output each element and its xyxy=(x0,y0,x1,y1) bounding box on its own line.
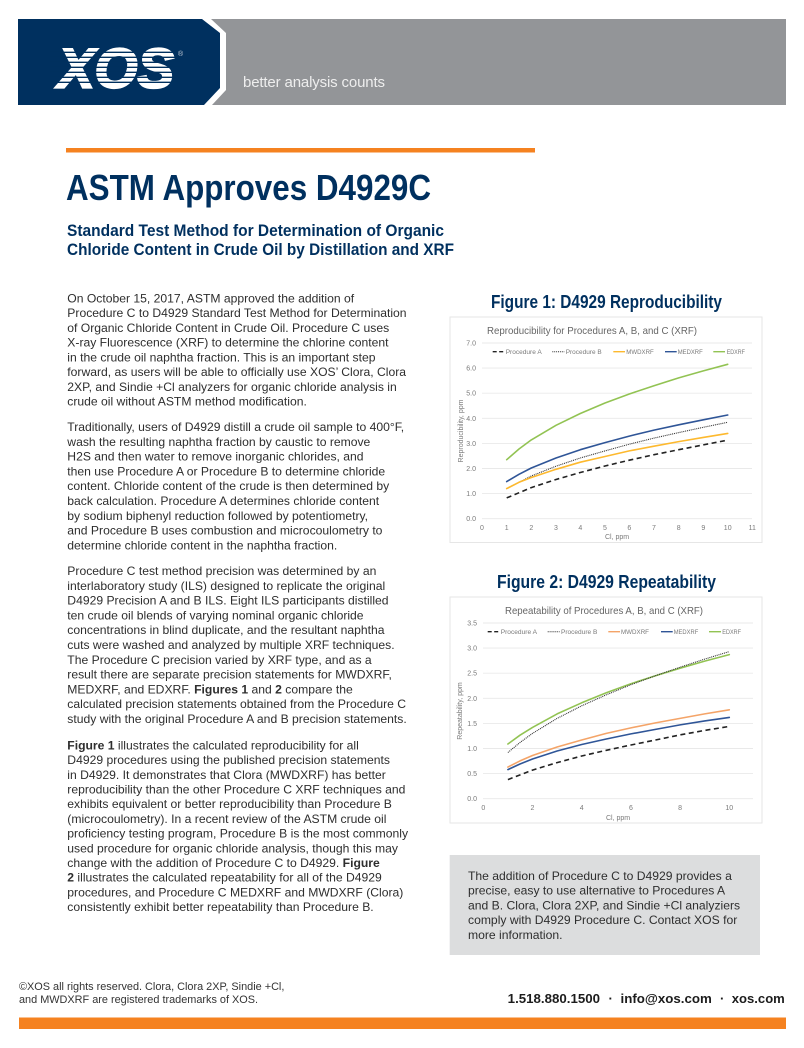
body paragraph 1: Procedure C to D4929 Standard Test Method for Determination xyxy=(67,306,407,320)
legend: Procedure A xyxy=(501,629,537,636)
body paragraph 2: back calculation. Procedure A determines chloride content xyxy=(67,494,380,508)
chart: reproducibility: 4 xyxy=(578,525,582,532)
body paragraph 4: change with the addition of Procedure C to D4929. Figure xyxy=(67,856,380,870)
footer: trademark notice: and MWDXRF are registered trademarks of XOS. xyxy=(19,994,258,1006)
chart: repeatability xyxy=(450,597,762,823)
series: MWDXRF xyxy=(507,433,728,489)
chart: reproducibility: 9 xyxy=(701,525,705,532)
chart: repeatability: 1.0 xyxy=(467,746,477,753)
chart: reproducibility: 5.0 xyxy=(466,391,476,398)
figure 1 heading: Figure 1: D4929 Reproducibility xyxy=(491,292,722,312)
tagline: better analysis counts xyxy=(243,74,385,91)
chart: repeatability: 6 xyxy=(629,805,633,812)
chart: reproducibility: 2 xyxy=(529,525,533,532)
chart: repeatability: 0.0 xyxy=(467,796,477,803)
banner: navy logo block xyxy=(18,19,220,105)
body paragraph 1: X-ray Fluorescence (XRF) to determine the chlorine content xyxy=(67,336,389,350)
chart: repeatability: 4 xyxy=(580,805,584,812)
chart: reproducibility: Reproducibility for Procedures A, B, and C (XRF) xyxy=(487,326,697,337)
body paragraph 1: crude oil without ASTM method modification. xyxy=(67,395,307,409)
body paragraph 1: in the crude oil naphtha fraction. This is an important step xyxy=(67,350,376,364)
body paragraph 4: 2 illustrates the calculated repeatability for all of the D4929 xyxy=(67,871,382,885)
body paragraph 1: On October 15, 2017, ASTM approved the addition of xyxy=(67,291,355,305)
subtitle: Standard Test Method for Determination of Organic xyxy=(67,221,444,240)
legend: MWDXRF xyxy=(626,349,654,356)
body paragraph 3: The Procedure C precision varied by XRF type, and as a xyxy=(67,653,372,667)
footer: contact details: · xyxy=(720,991,724,1006)
body paragraph 2: wash the resulting naphtha fraction by caustic to remove xyxy=(66,435,371,449)
legend xyxy=(488,629,741,636)
body paragraph 3: Procedure C test method precision was determined by an xyxy=(67,564,376,578)
orange rule above title xyxy=(66,148,535,152)
callout: contact note: The addition of Procedure C to D4929 provides a xyxy=(468,869,732,883)
body paragraph 4: in D4929. It demonstrates that Clora (MWDXRF) has better xyxy=(67,768,386,782)
series: Procedure B xyxy=(508,652,729,752)
series: Procedure B xyxy=(507,422,728,489)
subtitle: Chloride Content in Crude Oil by Distillation and XRF xyxy=(67,240,454,259)
chart: repeatability: 10 xyxy=(725,805,733,812)
body paragraph 3: MEDXRF, and EDXRF. Figures 1 and 2 compare the xyxy=(67,682,353,696)
chart: reproducibility: 3.0 xyxy=(466,441,476,448)
body paragraph 1: 2XP, and Sindie +Cl analyzers for organic chloride analysis in xyxy=(67,380,397,394)
callout: contact note: more information. xyxy=(468,928,562,942)
body paragraph 4: Figure 1 illustrates the calculated reproducibility for all xyxy=(67,738,359,752)
body paragraph 3: study with the original Procedure A and B precision statements. xyxy=(67,712,407,726)
legend: MEDXRF xyxy=(678,349,703,356)
body paragraph 4: consistently exhibit better repeatability than Procedure B. xyxy=(67,900,374,914)
subtitle xyxy=(67,221,454,259)
chart: repeatability: Repeatability of Procedures A, B, and C (XRF) xyxy=(505,606,703,617)
chart: repeatability: 2.5 xyxy=(467,671,477,678)
footer: contact details: info@xos.com xyxy=(620,991,712,1006)
body paragraph 2: and Procedure B uses combustion and microcoulometry to xyxy=(67,524,383,538)
body paragraph 4: proficiency testing program, Procedure B is the most commonly xyxy=(67,827,409,841)
body paragraph 2: H2S and then water to remove inorganic chlorides, and xyxy=(67,450,364,464)
series: MEDXRF xyxy=(507,415,728,482)
legend: EDXRF xyxy=(727,349,745,356)
body paragraph 3: cuts were washed and analyzed by multiple XRF techniques. xyxy=(67,638,395,652)
logo: XOS striped wordmark: XOS xyxy=(55,36,174,100)
chart: reproducibility: 11 xyxy=(749,525,756,532)
chart: reproducibility: 1.0 xyxy=(466,491,476,498)
figure 2 heading: Figure 2: D4929 Repeatability xyxy=(497,572,716,592)
body paragraph 4: reproducibility than the other Procedure C XRF techniques and xyxy=(67,782,405,796)
body paragraph 3: interlaboratory study (ILS) designed to replicate the original xyxy=(67,579,385,593)
chart: repeatability: Repeatability, ppm xyxy=(457,682,464,740)
body paragraph 3: calculated precision statements obtained from the Procedure C xyxy=(67,697,406,711)
chart: repeatability: 2 xyxy=(531,805,535,812)
logo: XOS striped wordmark: ® xyxy=(178,50,184,58)
chart: reproducibility: 0 xyxy=(480,525,484,532)
series: Procedure A xyxy=(508,726,729,780)
chart: reproducibility: 6.0 xyxy=(466,366,476,373)
legend: Procedure B xyxy=(566,349,602,356)
body paragraph 3: result there are separate precision statements for MWDXRF, xyxy=(67,668,392,682)
body paragraph 2: determine chloride content in the naphtha fraction. xyxy=(67,538,337,552)
chart: repeatability: 2.0 xyxy=(467,696,477,703)
body paragraph 4: procedures, and Procedure C MEDXRF and MWDXRF (Clora) xyxy=(67,885,403,899)
body paragraph 4: D4929 procedures using the published precision statements xyxy=(67,753,390,767)
legend: MEDXRF xyxy=(674,629,698,636)
chart: reproducibility: 5 xyxy=(603,525,607,532)
chart: reproducibility: 3 xyxy=(554,525,558,532)
legend: Procedure B xyxy=(561,629,598,636)
banner: grey tagline strip xyxy=(211,19,786,105)
chart: repeatability: 8 xyxy=(678,805,682,812)
chart: reproducibility: 10 xyxy=(724,525,732,532)
chart: reproducibility: 6 xyxy=(627,525,631,532)
chart: reproducibility: 1 xyxy=(505,525,509,532)
series: MWDXRF xyxy=(508,710,729,767)
legend xyxy=(493,349,745,356)
body paragraph 4: exhibits equivalent or better reproducibility than Procedure B xyxy=(67,797,392,811)
body paragraph 1: of Organic Chloride Content in Crude Oil. Procedure C uses xyxy=(67,321,389,335)
body paragraph 1: forward, as users will be able to officially use XOS’ Clora, Clora xyxy=(67,365,406,379)
chart: repeatability: 1.5 xyxy=(467,721,477,728)
chart: reproducibility: 0.0 xyxy=(466,516,476,523)
chart: reproducibility: 7 xyxy=(652,525,656,532)
legend: Procedure A xyxy=(506,349,542,356)
chart: reproducibility: 8 xyxy=(677,525,681,532)
series: Procedure A xyxy=(507,440,728,498)
chart: repeatability: 0 xyxy=(481,805,485,812)
chart: repeatability: 3.0 xyxy=(467,646,477,653)
footer: contact details: · xyxy=(608,991,613,1006)
series: MEDXRF xyxy=(508,717,729,770)
body paragraph 2: content. Chloride content of the crude is then determined by xyxy=(67,479,390,493)
body paragraph 3: concentrations in blind duplicate, and the resultant naphtha xyxy=(67,623,385,637)
footer: contact details: 1.518.880.1500 xyxy=(508,991,600,1006)
callout: contact note: precise, easy to use alternative to Procedures A xyxy=(468,884,726,898)
series: EDXRF xyxy=(508,655,729,744)
body paragraph 2: Traditionally, users of D4929 distill a crude oil sample to 400°F, xyxy=(67,420,404,434)
chart: reproducibility: Cl, ppm xyxy=(605,534,629,541)
chart: repeatability: 0.5 xyxy=(467,771,477,778)
body paragraph 3: D4929 Precision A and B ILS. Eight ILS participants distilled xyxy=(67,594,389,608)
footer: trademark notice: ©XOS all rights reserved. Clora, Clora 2XP, Sindie +Cl, xyxy=(19,981,284,993)
chart: repeatability: 3.5 xyxy=(467,620,477,628)
legend: MWDXRF xyxy=(621,629,649,636)
callout: contact note xyxy=(450,855,760,955)
body paragraph 3: ten crude oil blends of varying nominal organic chloride xyxy=(67,608,364,622)
legend: EDXRF xyxy=(722,629,741,636)
callout: contact note: comply with D4929 Procedure C. Contact XOS for xyxy=(468,913,737,927)
footer: contact details: xos.com xyxy=(732,991,785,1006)
callout: contact note: and B. Clora, Clora 2XP, and Sindie +Cl analyziers xyxy=(468,898,740,912)
chart: reproducibility: 7.0 xyxy=(466,340,476,348)
body paragraph 4: (microcoulometry). In a recent review of the ASTM crude oil xyxy=(67,812,386,826)
chart: repeatability: Cl, ppm xyxy=(606,815,630,822)
series: EDXRF xyxy=(507,364,728,460)
footer: orange bar xyxy=(19,1018,786,1029)
body paragraph 2: by sodium biphenyl reduction followed by potentiometry, xyxy=(67,509,368,523)
chart: reproducibility: 4.0 xyxy=(466,416,476,423)
chart: reproducibility xyxy=(450,317,762,542)
title: ASTM Approves D4929C xyxy=(66,167,431,208)
body paragraph 4: used procedure for organic chloride analysis, though this may xyxy=(67,841,399,855)
header banner xyxy=(18,19,786,105)
chart: reproducibility: 2.0 xyxy=(466,466,476,473)
chart: reproducibility: Reproducibility, ppm xyxy=(458,399,465,462)
body paragraph 2: then use Procedure A or Procedure B to determine chloride xyxy=(67,464,385,478)
